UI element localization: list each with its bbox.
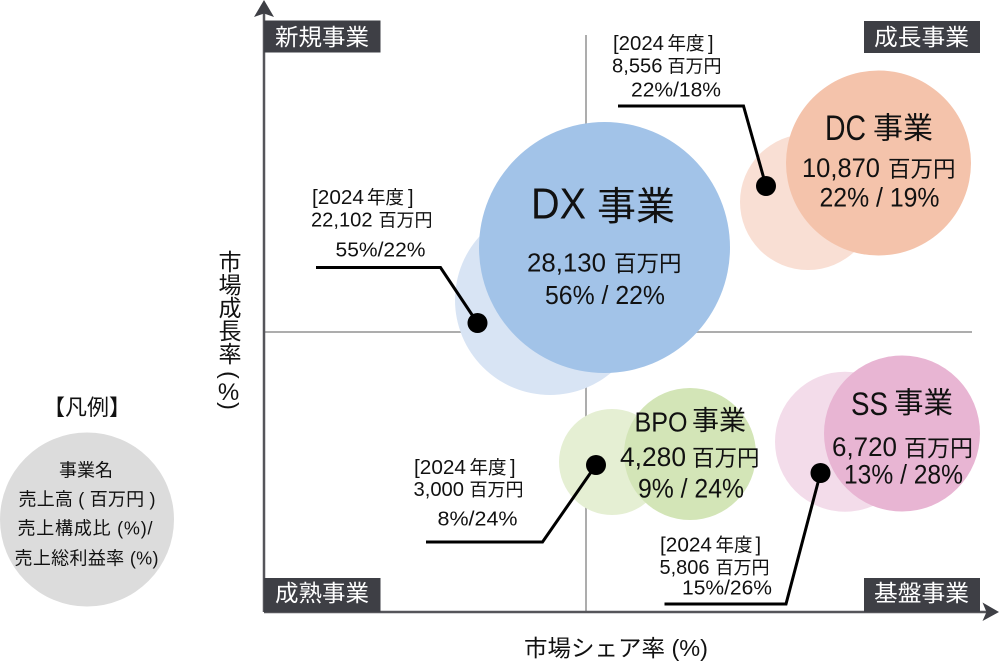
bubble: DC current: DC: [825, 109, 866, 148]
bubble: BPO current: 9% / 24%: [638, 473, 744, 503]
y axis title: %: [218, 379, 239, 406]
quadrant label: 成熟事業: [264, 578, 380, 612]
bubble: DX current: 百万円: [614, 252, 682, 276]
quadrant label: 基盤事業: 基盤事業: [874, 580, 969, 606]
legend circle: 売上構成比 (%)/: [18, 518, 152, 538]
quadrant label: 新規事業: 新規事業: [275, 24, 369, 50]
callout text: DX 2024: ]: [408, 187, 414, 209]
bubble: DC current: [786, 70, 971, 256]
bubble: BPO current: 4,280: [620, 442, 686, 472]
callout text: DX 2024: 年度: [367, 187, 404, 208]
callout text: SS 2024: 5,806: [660, 557, 710, 579]
bubble: DC current: 百万円: [888, 157, 956, 182]
legend title: 【凡例】: [43, 395, 131, 420]
bubble: SS current: 百万円: [904, 435, 973, 461]
bubble: DX current: 56% / 22%: [545, 280, 665, 310]
callout text: DX 2024: [2024: [312, 187, 364, 209]
legend circle: 売上高 ( 百万円 ): [18, 490, 156, 510]
bubble: SS 2024: [775, 372, 915, 512]
bubble: BPO 2024: [559, 409, 665, 515]
horizontal axis arrow: [264, 602, 999, 621]
callout text: DC 2024: [2024: [613, 33, 664, 55]
bubble: DC 2024: [740, 134, 876, 270]
callout text: DX 2024: 55%/22%: [336, 240, 426, 262]
bubble: DX current: 28,130: [527, 248, 606, 278]
callout text: DC 2024: 年度: [668, 33, 705, 54]
quadrant label: 新規事業: [264, 20, 380, 52]
callout text: DC 2024: 22%/18%: [631, 80, 721, 102]
callout text: BPO 2024: 3,000: [414, 479, 464, 501]
callout text: SS 2024: ]: [756, 534, 761, 556]
bubble: DX current: [479, 122, 730, 373]
y axis title: (: [217, 371, 243, 379]
bubble: DX current: DX: [531, 180, 586, 228]
callout text: BPO 2024: 年度: [470, 457, 507, 478]
callout leader: BPO: [426, 455, 606, 542]
callout leader: DC: [618, 106, 776, 196]
callout text: DC 2024: [612, 33, 722, 102]
bubble: DX current: 事業: [597, 186, 675, 229]
bubble: BPO current: [620, 388, 760, 520]
legend circle: [0, 432, 174, 606]
callout text: DX 2024: 百万円: [378, 210, 432, 230]
callout text: DC 2024: 百万円: [668, 56, 722, 76]
quadrant label: 成長事業: 成長事業: [874, 24, 969, 50]
bubble: DC current: 事業: [873, 112, 933, 146]
bubble: SS current: [824, 356, 980, 512]
x axis title: 市場シェア率 (%): [524, 635, 708, 661]
callout leader: SS: [664, 463, 830, 604]
bubble: DC current: 10,870: [802, 153, 880, 183]
callout text: BPO 2024: ]: [510, 457, 516, 479]
vertical axis arrow: [254, 0, 274, 612]
bubble: DX 2024: [455, 205, 645, 395]
quadrant label: 基盤事業: [864, 578, 980, 612]
callout text: SS 2024: 年度: [716, 534, 753, 556]
bubble: SS current: 事業: [894, 387, 953, 420]
legend circle: 売上総利益率 (%): [14, 548, 158, 568]
legend circle: 事業名: [59, 460, 113, 480]
y axis title: [215, 250, 243, 410]
callout leader: DX: [316, 268, 488, 333]
bubble: SS current: 13% / 28%: [844, 459, 963, 489]
callout text: SS 2024: 15%/26%: [682, 577, 772, 599]
bubble: BPO current: 百万円: [692, 446, 760, 471]
callout text: DC 2024: 8,556: [612, 56, 662, 78]
quadrant label: 成長事業: [864, 21, 980, 53]
callout text: DC 2024: ]: [708, 33, 714, 55]
bubble: SS current: SS: [851, 386, 888, 422]
bubble: BPO current: BPO: [634, 406, 688, 438]
callout text: SS 2024: [660, 534, 772, 599]
callout text: DX 2024: 22,102: [311, 210, 372, 232]
callout text: BPO 2024: 8%/24%: [438, 508, 518, 530]
bubble: DC current: 22% / 19%: [820, 182, 940, 212]
callout text: SS 2024: 百万円: [716, 558, 770, 578]
y axis title: ): [217, 402, 243, 410]
y axis title: 市場成長率: [215, 250, 242, 365]
callout text: SS 2024: [2024: [660, 534, 712, 556]
quadrant divider lines: [264, 35, 972, 612]
callout text: BPO 2024: [414, 457, 524, 530]
quadrant label: 成熟事業: 成熟事業: [275, 580, 369, 606]
bubble: SS current: 6,720: [832, 432, 897, 462]
callout text: BPO 2024: 百万円: [470, 480, 524, 500]
callout text: BPO 2024: [2024: [414, 457, 466, 479]
bubble: BPO current: 事業: [692, 406, 746, 436]
callout text: DX 2024: [311, 187, 432, 262]
